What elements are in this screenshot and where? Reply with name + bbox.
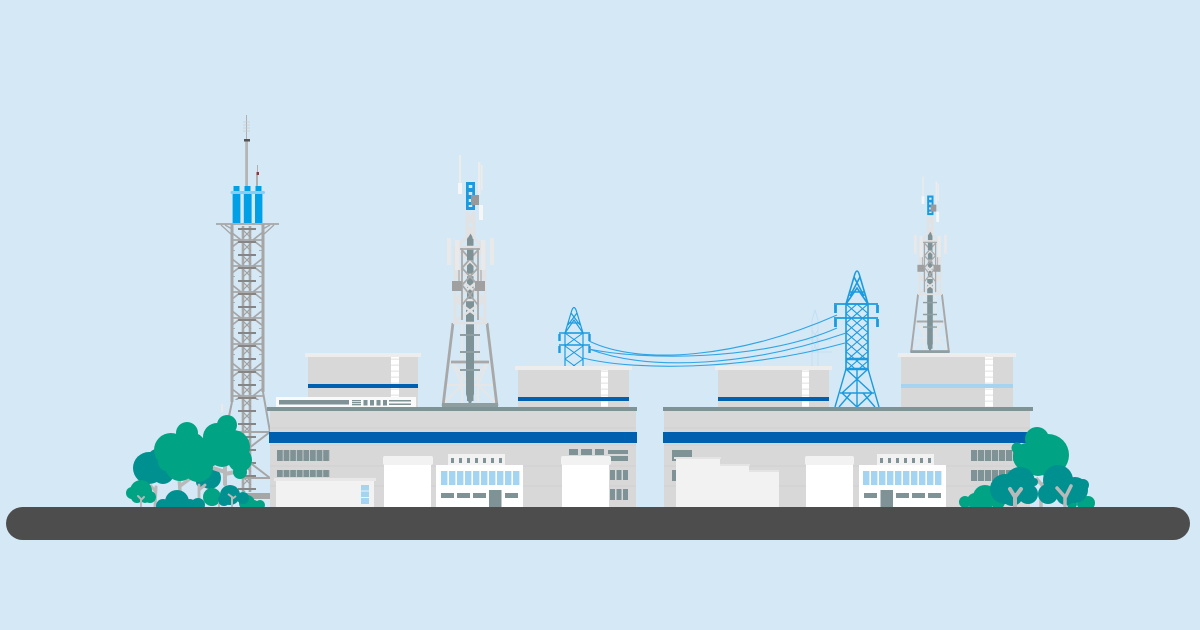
low annex bbox=[274, 478, 376, 507]
big blue pylon bbox=[834, 271, 879, 407]
left main building bbox=[267, 407, 637, 507]
white block right bbox=[561, 456, 611, 507]
tower body bbox=[216, 224, 279, 499]
cell tower right bbox=[910, 177, 950, 353]
upper block: right front bbox=[715, 366, 832, 407]
white block bbox=[805, 456, 854, 507]
blue stacks bbox=[230, 186, 265, 223]
low green bbox=[959, 485, 1095, 510]
green canopy bbox=[154, 415, 252, 482]
trees right bbox=[959, 427, 1095, 510]
upper block: rooftop annex bbox=[276, 397, 416, 407]
stepped annex bbox=[674, 457, 779, 507]
green canopy bbox=[1012, 427, 1069, 476]
trunks behind canopy bbox=[151, 466, 235, 507]
faint background pylon bbox=[798, 310, 832, 366]
upper block: left rear bbox=[305, 353, 421, 407]
windows right bbox=[569, 449, 628, 500]
blue band bbox=[269, 432, 637, 443]
white block bbox=[383, 456, 433, 507]
office block bbox=[436, 454, 523, 507]
blue band bbox=[663, 432, 1030, 443]
trees left bbox=[126, 415, 265, 514]
teal bbox=[990, 465, 1089, 506]
left lattice tower with stacks bbox=[216, 115, 279, 499]
windows bbox=[672, 450, 1016, 481]
trunks bbox=[1010, 486, 1071, 507]
power lines bbox=[583, 315, 846, 366]
right main building bbox=[663, 407, 1033, 507]
road bbox=[6, 507, 1190, 540]
office block bbox=[859, 454, 946, 507]
cell tower left bbox=[442, 155, 498, 407]
teal tree back bbox=[133, 448, 221, 489]
small blue pylon bbox=[559, 308, 590, 367]
trunk back bbox=[1036, 478, 1048, 507]
antenna mast bbox=[243, 115, 259, 189]
upper block: right rear bbox=[898, 353, 1016, 407]
small trees bbox=[126, 480, 265, 511]
windows left bbox=[277, 450, 330, 477]
upper block: left front bbox=[515, 366, 632, 407]
